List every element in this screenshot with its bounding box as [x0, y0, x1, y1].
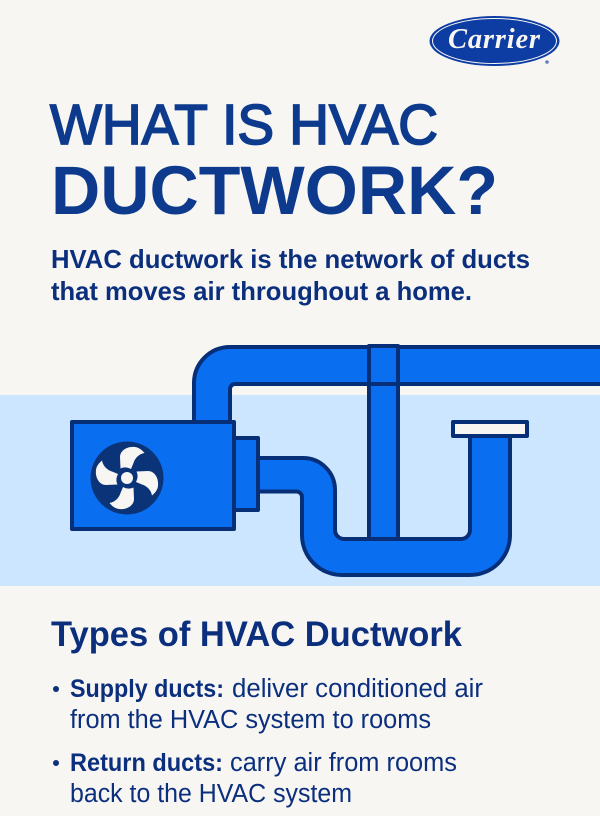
vertical stem duct: [369, 346, 398, 539]
upper supply duct: [194, 347, 600, 424]
light blue band: [0, 395, 600, 586]
bullet: supply ducts: deliver conditioned air: [232, 675, 484, 703]
logo: Carrier: [430, 16, 560, 66]
bullet: return ducts: back to the HVAC system: [70, 780, 352, 808]
bullet: supply ducts: Supply ducts:: [70, 675, 224, 703]
icon: fan: [90, 442, 164, 514]
bullet: supply ducts: from the HVAC system to rooms: [70, 706, 431, 734]
bullet: return ducts: [53, 749, 457, 808]
register plate: [453, 422, 527, 436]
intro text: that moves air throughout a home.: [51, 276, 472, 306]
title: WHAT IS HVAC: [50, 93, 438, 157]
air handler unit: [72, 422, 234, 529]
intro text: [51, 244, 530, 306]
section heading: Types of HVAC Ductwork: [51, 615, 463, 654]
duct diagram: [72, 346, 600, 575]
intro text: HVAC ductwork is the network of ducts: [51, 244, 530, 274]
bullet: return ducts: carry air from rooms: [230, 749, 457, 777]
connector collar: [234, 438, 258, 510]
title: [50, 93, 498, 229]
bullet: return ducts: Return ducts:: [70, 749, 223, 777]
logo: Carrier: Carrier: [448, 24, 541, 55]
title: DUCTWORK?: [51, 152, 498, 229]
bullet: supply ducts: [53, 675, 484, 734]
lower return duct: [258, 436, 510, 575]
